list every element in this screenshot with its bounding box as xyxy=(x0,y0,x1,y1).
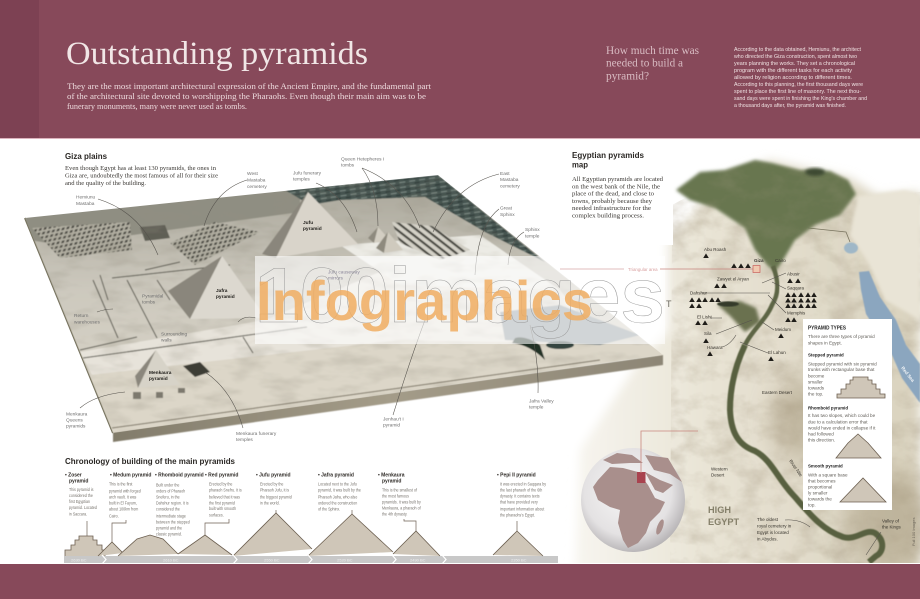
Pepi profile xyxy=(493,531,543,556)
map place labels: Giza xyxy=(754,258,764,263)
Jufu entry: in the world. xyxy=(260,500,280,506)
timeline dates: 2610 BC xyxy=(163,558,179,562)
panel: Egypt map xyxy=(575,160,920,580)
eastern mountains xyxy=(772,380,920,570)
rhomboid type: would have ended in collapse if it xyxy=(808,426,876,430)
Red entry: Erected by the xyxy=(209,481,233,487)
diorama callout labels: Queen Hetepheres I xyxy=(341,156,384,162)
light plateau xyxy=(80,272,575,375)
Red entry: pharaoh Snefru. It is xyxy=(209,487,242,493)
body: place of the dead, and close to xyxy=(572,190,654,198)
Jufu pyramid xyxy=(262,192,358,258)
Jafra entry: • Jafra pyramid xyxy=(318,472,354,478)
Giza plains text xyxy=(65,165,218,187)
smooth type: Smooth pyramid xyxy=(808,464,843,468)
subheading: time to build: needed to build a xyxy=(606,58,683,70)
body: needed infrastructure for the xyxy=(572,205,651,212)
diorama surface xyxy=(25,175,665,435)
map place labels xyxy=(690,247,806,478)
sphinx valley blue shade xyxy=(500,305,640,345)
front desert xyxy=(92,344,658,410)
Jufu profile xyxy=(233,513,312,556)
map place labels: Abusir xyxy=(787,272,800,276)
locator line xyxy=(641,431,698,473)
rhomboid type xyxy=(808,406,881,458)
rhomboid type: It has two slopes, which could be xyxy=(808,413,876,418)
faint causeway label xyxy=(328,270,360,282)
body xyxy=(572,176,664,220)
Jufu entry: Erected by the xyxy=(260,481,284,487)
Rhomboid entry xyxy=(155,472,204,537)
Jafra valley temple shadow xyxy=(512,337,545,360)
Red entry: • Red pyramid xyxy=(205,472,238,478)
Jufu entry: • Jufu pyramid xyxy=(256,472,291,478)
diorama callout labels: temples xyxy=(236,437,253,443)
body: complex building process. xyxy=(572,212,644,220)
Red profile xyxy=(178,535,232,555)
pyramid labels xyxy=(149,220,322,382)
build time text: According to this planning, the first thousand days were xyxy=(734,82,863,88)
panel: pyramid types xyxy=(803,319,892,510)
label fragment: T of Lower Egypt: T xyxy=(666,299,672,309)
Red entry: built with smooth xyxy=(209,505,237,511)
map place labels: Saqqara xyxy=(787,286,805,290)
header band xyxy=(0,0,920,139)
heading xyxy=(572,151,645,170)
timeline dates: 2630 BC xyxy=(71,558,87,562)
diorama callout labels: Jufu funerary xyxy=(293,170,322,176)
map place labels: Dahshur xyxy=(690,290,708,296)
heading: PYRAMID TYPES xyxy=(808,326,847,332)
intro: shapes in Egypt. xyxy=(808,340,842,346)
Medum entry: arch vault. It was xyxy=(109,494,136,500)
diorama front edge xyxy=(113,355,663,442)
Pepi entry xyxy=(497,472,547,518)
Sinai lighter land xyxy=(850,190,920,320)
Menkaura entry: the 4th dynasty. xyxy=(382,511,407,517)
diorama callout labels: Surrounding xyxy=(161,332,187,338)
diorama callout labels: pyramids xyxy=(66,424,86,430)
diorama callout labels: Hemiunu xyxy=(76,194,96,200)
intro text: funerary monuments, many were never used as tombs. xyxy=(67,102,247,111)
callout: oldest royal cemetery: Egypt is located xyxy=(757,530,789,535)
Suez lake xyxy=(844,242,858,254)
stepped type: trunks with rectangular base that xyxy=(808,367,875,372)
callout: Valley of the Kings xyxy=(866,518,902,555)
Menkaura entry: • Menkaura xyxy=(378,472,405,478)
Menkaura entry: the most famous xyxy=(382,493,409,499)
smooth type: towards the xyxy=(808,496,832,502)
Rhomboid entry: intermediate stage xyxy=(156,513,186,519)
Meidum profile xyxy=(98,542,123,556)
Pepi entry: important information about xyxy=(500,506,545,512)
Jufu entry: the biggest pyramid xyxy=(260,494,292,500)
Pepi entry: the last pharaoh of the 6th xyxy=(500,487,543,493)
pyramid labels: Jafra xyxy=(216,288,228,294)
Menkaura funerary temple xyxy=(183,362,210,377)
build time text: program with the different tasks for each activity xyxy=(734,68,853,74)
west mastaba main group xyxy=(170,222,260,265)
subheading: time to build xyxy=(606,45,700,82)
smooth type: ly smaller xyxy=(808,490,828,496)
footer band xyxy=(0,564,920,599)
Pepi entry: dynasty. It contains texts xyxy=(500,493,540,499)
Rhomboid entry: Built under the xyxy=(156,482,180,488)
intro: There are three types of pyramid xyxy=(808,334,875,339)
Jafra profile xyxy=(308,514,393,556)
stepped type xyxy=(808,352,885,398)
Zoser profile xyxy=(65,536,105,556)
diorama callout labels: pyramid xyxy=(383,422,400,428)
panel: chronology xyxy=(64,457,558,564)
Red entry: the first pyramid xyxy=(209,500,235,506)
Fayum oasis xyxy=(718,301,760,332)
Menkaura entry xyxy=(378,472,422,517)
callout: oldest royal cemetery: in Abydos. xyxy=(757,536,778,542)
stepped type: towards xyxy=(808,386,825,390)
stepped type: smaller xyxy=(808,380,823,384)
build time text xyxy=(734,47,867,109)
callout: oldest royal cemetery: The oldest xyxy=(757,517,779,522)
diorama callout labels: Mastaba xyxy=(76,201,95,207)
timeline dates: 2490 BC xyxy=(410,558,426,562)
map place labels: River Nile xyxy=(788,459,804,478)
smooth type: that becomes xyxy=(808,478,836,484)
diorama callout labels: Queens xyxy=(66,418,83,424)
Queen pyramids xyxy=(368,227,403,253)
watermark band xyxy=(255,256,665,344)
timeline dates: 2350 BC xyxy=(511,558,527,562)
Red Sea xyxy=(859,271,920,403)
subheading: time to build: How much time was xyxy=(606,45,700,57)
map place labels: Sila xyxy=(704,331,712,336)
timeline chevrons xyxy=(102,555,446,564)
Rhomboid profile xyxy=(118,535,178,556)
rhomboid type: this direction. xyxy=(808,438,835,442)
Zoser entry: • Zoser xyxy=(65,472,82,478)
Rhomboid entry: Dahshur region. It is xyxy=(156,500,189,506)
Medum entry xyxy=(109,472,151,519)
panel: Egyptian pyramids map text xyxy=(560,140,673,245)
map place labels: Eastern Desert xyxy=(762,390,793,395)
Pepi entry: the pharaohs's Egypt. xyxy=(500,512,535,518)
Red entry: surfaces. xyxy=(209,512,224,518)
rhomboid type: had followed xyxy=(808,432,834,436)
Medum entry: about 100km from xyxy=(109,506,139,512)
watermark: Infographics: Infographics xyxy=(256,269,593,332)
map place labels: Western xyxy=(711,466,728,472)
diorama callout labels: walls xyxy=(161,338,172,344)
Jafra entry: Pharaoh Jafra, who also xyxy=(318,494,358,500)
Menkaura entry: Menkaura, a pharaoh of xyxy=(382,505,421,511)
timeline dates: 2550 BC xyxy=(264,558,280,562)
build time text: a thousand days after, the pyramid was finished. xyxy=(734,103,846,109)
map place labels: Desert xyxy=(711,472,725,478)
intro text: of the architectural site devoted to worshipping the Pharaohs. Even though their main aim was to be xyxy=(67,92,426,101)
build time text: sand days were spent in finishing the King's chamber and xyxy=(734,96,867,102)
Jafra entry: ordered the construction xyxy=(318,500,358,506)
Giza plains heading: Giza plains xyxy=(65,152,108,161)
Jafra entry: pyramid, it was built by the xyxy=(318,487,361,493)
stepped type: Stepped pyramid xyxy=(808,352,844,358)
build time text: According to the data obtained, Hemiunu, the architect xyxy=(734,47,862,53)
Africa and land masses xyxy=(593,453,682,548)
Jafra pyramid xyxy=(168,256,266,319)
map place labels: Abu Roash xyxy=(704,247,727,252)
map desert base xyxy=(575,160,920,580)
Pepi entry: It was erected in Saqqara by xyxy=(500,481,547,487)
timeline leaders xyxy=(87,510,517,542)
label: High Egypt: HIGH xyxy=(708,505,731,515)
Rhomboid entry: between the stepped xyxy=(156,519,190,525)
diorama callout labels: Sphinx xyxy=(500,212,515,218)
Rhomboid entry: pyramid and the xyxy=(156,525,183,531)
Zoser entry xyxy=(65,472,97,517)
label: High Egypt: EGYPT xyxy=(708,517,740,527)
Fayum lake xyxy=(717,301,739,307)
smooth type: With a square base xyxy=(808,472,848,478)
heading: Egyptian pyramids xyxy=(572,151,645,160)
diorama callout labels: cemetery xyxy=(247,184,267,190)
rhomboid type: Rhomboid pyramid xyxy=(808,406,848,410)
diorama callout labels: Return xyxy=(74,313,89,319)
pyramid labels: Jufu xyxy=(303,220,313,226)
triangular area pointer xyxy=(560,266,760,272)
Hemiunu mastaba block xyxy=(140,225,170,241)
triangular area pointer: Triangular area xyxy=(628,267,658,272)
back rubble strip xyxy=(25,188,300,245)
subheading: time to build: pyramid? xyxy=(606,70,649,82)
callout: Valley of the Kings: Valley of xyxy=(882,518,900,524)
Medum entry: • Medum pyramid xyxy=(110,472,151,478)
body: on the west bank of the Nile, the xyxy=(572,184,660,190)
stepped type: Stepped pyramid with six pyramid xyxy=(808,362,877,366)
Medum entry: built in El Fayum, xyxy=(109,500,137,506)
Menkaura entry: pyramid xyxy=(382,478,401,484)
map place labels: Zawyet el Aryan xyxy=(717,276,750,282)
timeline dates xyxy=(71,558,527,562)
build time text: who directed the Giza construction, spent almost two xyxy=(734,54,857,60)
Zoser entry: in Saccara. xyxy=(69,511,87,517)
map place labels: El Lahun xyxy=(768,350,786,355)
map place labels: Meidum xyxy=(775,327,791,332)
Jafra entry xyxy=(318,472,361,512)
map leader lines xyxy=(702,273,786,353)
title: Outstanding pyramids xyxy=(66,36,368,72)
diorama callout labels: Menkaura xyxy=(66,412,88,418)
stepped type: the top. xyxy=(808,392,823,396)
Medum entry: Cairo. xyxy=(109,513,119,519)
panel: Giza diorama xyxy=(25,175,665,442)
Zoser entry: considered the xyxy=(69,492,93,498)
smooth type xyxy=(808,464,886,508)
diorama callout labels: Menkaura funerary xyxy=(236,431,277,437)
callout: oldest royal cemetery xyxy=(757,517,810,542)
diorama callout leaders xyxy=(80,168,538,428)
Pepi entry: that have provided very xyxy=(500,499,539,505)
Giza plains text: Giza are, undoubtedly the most famous of all for their size xyxy=(65,172,218,180)
upper Nile river xyxy=(745,266,777,345)
pyramid labels: pyramid xyxy=(149,376,168,382)
Rhomboid entry: • Rhomboid pyramid xyxy=(155,472,204,478)
heading: map xyxy=(572,160,588,170)
diorama callout labels: Jenhau't I xyxy=(383,416,404,422)
smooth type: top. xyxy=(808,502,816,508)
intro text: They are the most important architectural expression of the Ancient Empire, and the fundamental part xyxy=(67,82,432,91)
diorama callout labels xyxy=(66,156,554,443)
back right town xyxy=(285,175,545,262)
Giza plains text: Even though Egypt has at least 130 pyramids, the ones in xyxy=(65,165,216,172)
watermark: 100images: 100images xyxy=(255,251,665,339)
Suez canal line xyxy=(808,228,850,242)
diorama callout labels: West xyxy=(247,171,259,177)
Red entry xyxy=(205,472,242,518)
diorama left edge xyxy=(25,218,113,433)
build time text: spent to place the first line of masonry. The next thou- xyxy=(734,89,861,95)
map place labels: Hawara xyxy=(707,345,723,350)
Rhomboid entry: considered the xyxy=(156,506,180,512)
Menkaura entry: This is the smallest of xyxy=(382,487,418,493)
map terrain texture xyxy=(670,180,920,563)
body: All Egyptian pyramids are located xyxy=(572,176,664,183)
map place labels: El Lisht xyxy=(697,314,713,320)
diorama callout labels: tombs xyxy=(142,300,156,306)
label: High Egypt xyxy=(708,505,740,527)
diorama callout labels: warehouses xyxy=(74,320,100,326)
globe locator xyxy=(581,431,698,552)
diorama callout labels: temple xyxy=(529,404,544,410)
smooth type: proportional xyxy=(808,484,832,490)
Menkaura entry: pyramids. It was built by xyxy=(382,499,422,505)
diorama callout labels: temples xyxy=(293,176,310,182)
Nile delta xyxy=(676,160,856,272)
pyramid labels: pyramid xyxy=(303,226,322,232)
delta mottling xyxy=(711,174,842,236)
Jufu entry xyxy=(256,472,292,506)
timeline dates: 2520 BC xyxy=(337,558,353,562)
chronology heading: Chronology of building of the main pyramids xyxy=(65,457,235,466)
diorama callout labels: Sphinx xyxy=(525,227,540,233)
diorama callout labels: Jafra Valley xyxy=(529,398,554,404)
body: towns, probably because they xyxy=(572,198,653,205)
photo credit: Full 100 Images xyxy=(911,518,916,546)
faint causeway label: Jufu causeway xyxy=(328,270,360,276)
timeline band xyxy=(64,556,558,563)
Menkaura pyramid xyxy=(134,350,174,388)
Pepi entry: • Pepi II pyramid xyxy=(497,472,536,478)
build time text: years planning the works. They set a chronological xyxy=(734,61,855,67)
Zoser entry: first Egyptian xyxy=(69,498,91,504)
diorama callout labels: temple xyxy=(525,234,540,240)
Rhomboid entry: orders of Pharaoh xyxy=(156,488,186,494)
delta darker patch xyxy=(805,168,825,176)
dune texture xyxy=(49,176,623,424)
Giza plains text: and the quality of the building. xyxy=(65,180,146,187)
Egypt highlight xyxy=(637,472,646,483)
Medum entry: This is the first xyxy=(109,481,133,487)
Rhomboid entry: Sneferu, in the xyxy=(156,494,180,500)
Zoser entry: This pyramid is xyxy=(69,486,93,492)
Menkaura profile xyxy=(393,531,440,556)
central white sand xyxy=(340,235,560,290)
build time text: allowed by religion according to different times. xyxy=(734,75,852,81)
diorama callout labels: Mastaba xyxy=(500,177,519,183)
rhomboid type: due to a calculation error that xyxy=(808,420,868,424)
Jufu entry: Pharaoh Jufu, it is xyxy=(260,487,289,493)
callout: oldest royal cemetery: royal cemetery in xyxy=(757,524,792,528)
east mastaba xyxy=(392,222,470,260)
Zoser entry: pyramid. Located xyxy=(69,504,97,510)
faint causeway label: mirrors xyxy=(328,276,344,282)
map place labels: Cairo xyxy=(775,258,786,263)
map place labels: Memphis xyxy=(787,310,806,316)
intro xyxy=(808,334,875,346)
pyramid labels: pyramid xyxy=(216,294,235,300)
diorama callout labels: cemetery xyxy=(500,184,520,190)
diorama callout labels: tombs xyxy=(341,162,355,168)
pyramid markers xyxy=(689,253,817,361)
label: Red Sea: Red Sea xyxy=(900,366,916,383)
diorama callout labels: Great xyxy=(500,206,513,212)
causeway plateau walls xyxy=(80,262,600,428)
Jafra entry: Located next to the Jufu xyxy=(318,481,357,487)
Zoser entry: pyramid xyxy=(69,478,88,484)
Red entry: believed that it was xyxy=(209,494,240,500)
Menkaura queens xyxy=(133,388,185,399)
west mastaba left group xyxy=(32,222,132,258)
Medum entry: pyramid with forged xyxy=(109,488,141,494)
callout: Valley of the Kings: the Kings xyxy=(882,524,902,530)
diorama callout labels: East xyxy=(500,171,510,177)
intro text xyxy=(67,82,432,111)
diorama callout labels: Pyramidal xyxy=(142,294,163,300)
lower Nile river xyxy=(730,345,882,562)
Rhomboid entry: classic pyramid. xyxy=(156,531,182,537)
pyramid labels: Menkaura xyxy=(149,370,172,376)
Jafra entry: of the Sphinx. xyxy=(318,506,340,512)
stepped type: become xyxy=(808,374,825,378)
diorama callout labels: Mastaba xyxy=(247,178,266,184)
